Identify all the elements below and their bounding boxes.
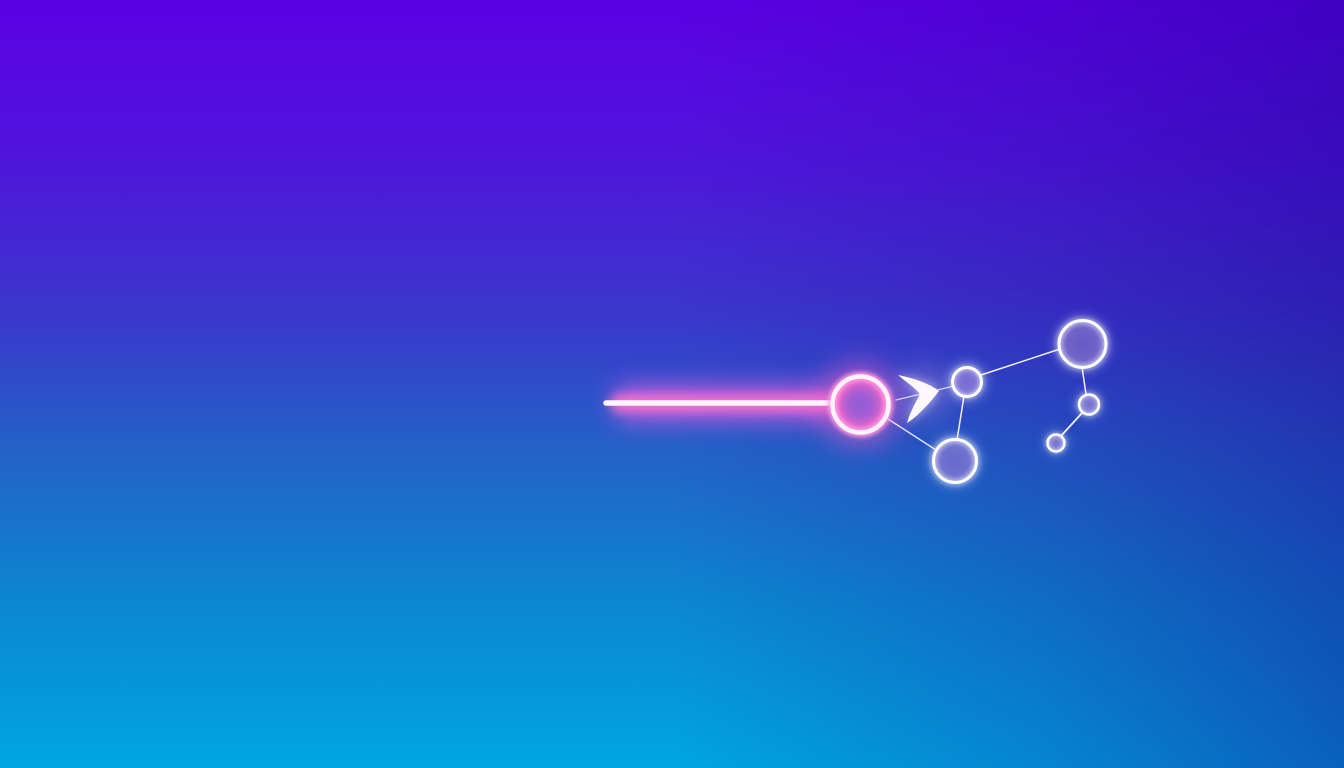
node: right small circle [1074,390,1104,420]
node: upper right large circle [1054,315,1112,373]
node: lower circle [928,434,982,488]
connector lines between nodes [888,349,1086,450]
node: pink start circle [832,376,888,432]
node: centre small circle [946,361,988,403]
node: lowest tiny circle [1043,430,1069,456]
glow: pink line halo [610,364,949,444]
pink glowing progress line [606,398,832,408]
arrow icon [898,375,939,423]
